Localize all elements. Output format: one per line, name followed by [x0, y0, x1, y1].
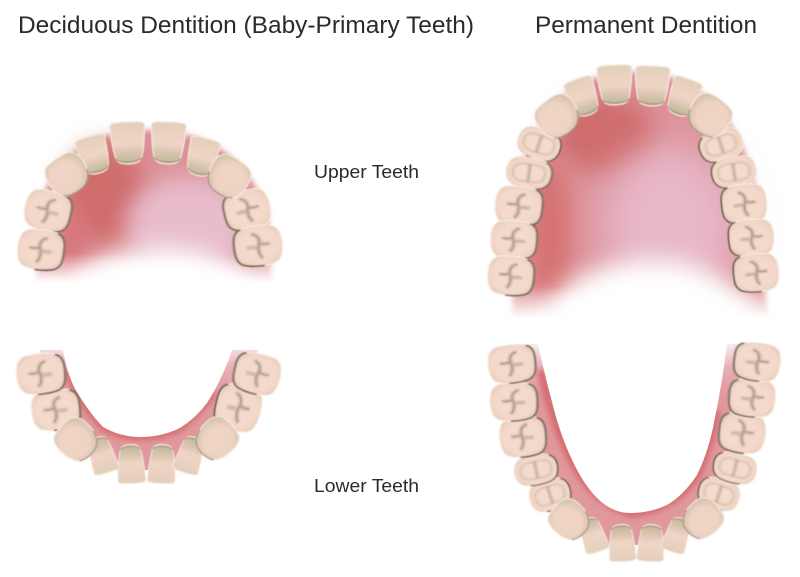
panel: permanent upper arch: [486, 64, 780, 316]
teeth: deciduous lower: [15, 349, 285, 484]
label: upper teeth: Upper Teeth: [314, 161, 419, 182]
panel: deciduous upper arch: [16, 121, 284, 280]
panel: permanent lower arch: [486, 340, 783, 562]
title: deciduous dentition: Deciduous Dentition (Baby-Primary Teeth): [18, 12, 474, 39]
palate: deciduous upper: [34, 126, 274, 280]
palate: permanent upper: [510, 68, 770, 316]
teeth: permanent upper: [486, 64, 780, 297]
title: permanent dentition: Permanent Dentition: [535, 12, 757, 39]
label: lower teeth: Lower Teeth: [314, 475, 419, 496]
teeth: deciduous upper: [16, 121, 284, 272]
panel: deciduous lower arch: [15, 349, 285, 484]
gum: permanent lower: [515, 344, 752, 545]
gum: deciduous lower: [40, 350, 258, 470]
teeth: permanent lower: [486, 340, 783, 562]
